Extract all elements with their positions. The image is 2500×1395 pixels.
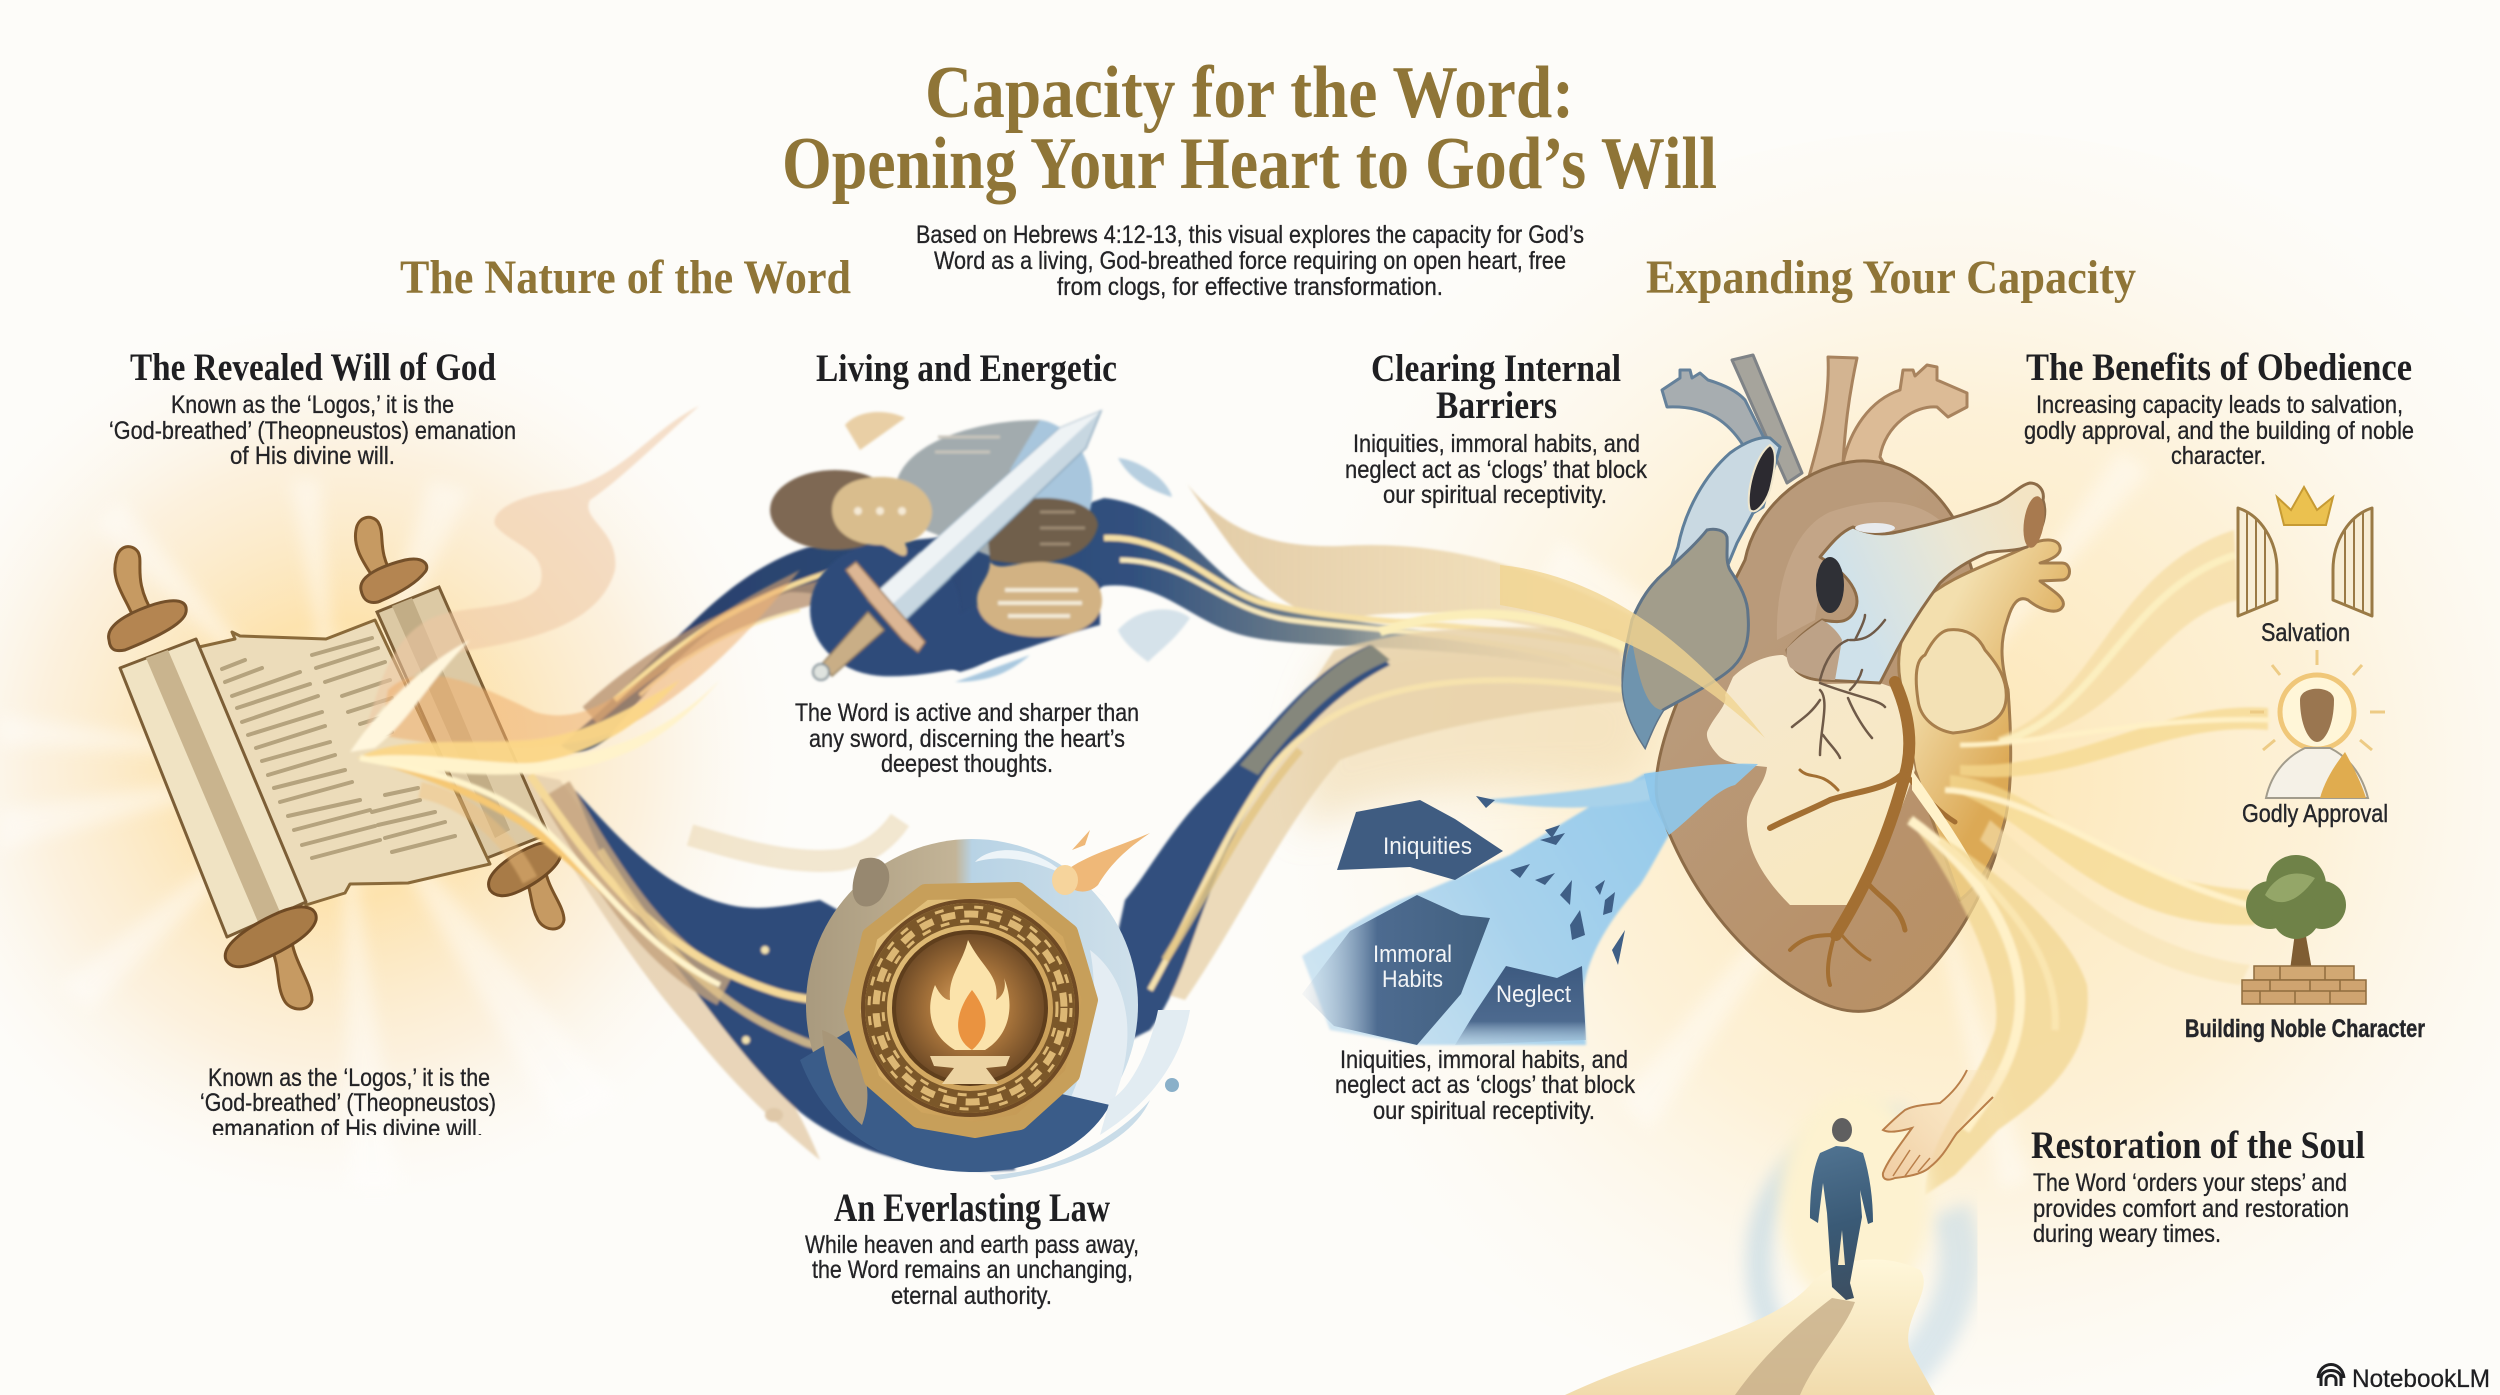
soft tan flow behind right side [1300, 639, 1660, 830]
rock: neglect [1455, 966, 1586, 1045]
text block: lower logos repeat (clipped): ‘God-breathed’ (Theopneustos) [200, 1089, 496, 1117]
scroll text lines [222, 638, 455, 858]
icon: godly approval figure [2250, 650, 2385, 798]
heart cream centre [1707, 655, 1915, 905]
intro text: from clogs, for effective transformation. [1057, 273, 1443, 301]
heart blue atrium [1660, 438, 1780, 600]
text block: living and energetic heading: Living and Energetic [816, 347, 1117, 390]
section heading: nature of the word: The Nature of the Word [400, 251, 851, 304]
text block: living and energetic body: any sword, discerning the heart’s [809, 725, 1125, 753]
right roll body [377, 587, 548, 858]
stream: lower wave to heart [1090, 614, 1765, 1060]
text block: clearing internal barriers: Clearing Internal [1371, 347, 1621, 390]
golden stream down to soul [1908, 818, 2088, 1195]
icon: golden medal with flame [852, 890, 1090, 1130]
path of light [1565, 1259, 1935, 1395]
heart cream lobe [1916, 630, 2006, 733]
rock: iniquities: Iniquities [1383, 833, 1472, 860]
text block: lower logos repeat (clipped): Known as the ‘Logos,’ it is the [208, 1064, 490, 1092]
intro text: Based on Hebrews 4:12-13, this visual explores the capacity for God’s [916, 221, 1584, 249]
text block: lower logos repeat (clipped) [201, 1068, 495, 1135]
text block: clogs repeat: our spiritual receptivity. [1373, 1097, 1595, 1125]
text block: clogs repeat: Iniquities, immoral habits, and [1340, 1046, 1628, 1074]
label: salvation: Salvation [2261, 619, 2350, 647]
intro text [916, 221, 1584, 301]
soul light swirl [1759, 1090, 1959, 1380]
stream: lower left wave [510, 770, 1015, 1171]
text block: restoration of the soul: during weary times. [2033, 1220, 2221, 1248]
text block: revealed will of god: ‘God-breathed’ (Theopneustos) emanation [109, 417, 516, 445]
label: godly approval: Godly Approval [2242, 800, 2388, 828]
icon: earth globe and navy swirl [800, 839, 1190, 1180]
title: Capacity for the Word: [925, 52, 1574, 134]
text block: restoration of the soul [2031, 1124, 2365, 1248]
heart right tan region [1899, 540, 2070, 900]
lower flanges [225, 907, 316, 967]
text block: benefits of obedience [2024, 346, 2414, 470]
flames from scroll [350, 406, 800, 985]
title: Opening Your Heart to God’s Will [782, 123, 1717, 205]
parchment [199, 620, 490, 905]
person shadow [1735, 1298, 1855, 1395]
text block: everlasting law: eternal authority. [891, 1282, 1052, 1310]
icon: tree on brick wall [2242, 855, 2366, 1004]
left roll body [120, 639, 306, 937]
heart main body [1656, 461, 2010, 1011]
text block: revealed will of god: Known as the ‘Logos,’ it is the [171, 391, 454, 419]
rock: immoral habits: Immoral [1373, 941, 1452, 968]
clog blue stream [1302, 764, 1758, 1045]
text block: revealed will of god: The Revealed Will of God [130, 346, 496, 389]
coronary branches [1770, 682, 1955, 985]
text block: benefits of obedience: character. [2171, 442, 2266, 470]
text block: clearing internal barriers: neglect act as ‘clogs’ that block [1345, 456, 1647, 484]
text block: living and energetic body: The Word is active and sharper than [795, 699, 1139, 727]
rock: immoral habits [1302, 895, 1490, 1045]
intro text: Word as a living, God-breathed force requiring on open heart, free [934, 247, 1566, 275]
heart vessels [1662, 355, 1967, 490]
text block: living and energetic body [795, 699, 1139, 778]
glow: heart radiance [1210, 130, 2500, 1395]
text block: clogs repeat: neglect act as ‘clogs’ that block [1335, 1071, 1635, 1099]
label: building noble character: Building Noble Character [2185, 1015, 2425, 1043]
text block: revealed will of god: of His divine will. [230, 442, 395, 470]
light beams entering heart [1500, 565, 1765, 738]
text block: clearing internal barriers: Iniquities, immoral habits, and [1353, 430, 1640, 458]
stream: upper wave to heart [561, 484, 1750, 752]
rock: iniquities [1337, 800, 1503, 880]
text block: everlasting law [805, 1185, 1139, 1310]
icon: scroll [109, 517, 564, 1009]
golden streams to benefits [1945, 530, 2270, 985]
heart gray lobe [1623, 529, 1748, 747]
glow: scroll radiance [0, 320, 840, 1200]
rock: immoral habits: Habits [1382, 966, 1443, 993]
text block: restoration of the soul: provides comfort and restoration [2033, 1195, 2349, 1223]
icon: gates and crown [2238, 487, 2372, 616]
text block: everlasting law: An Everlasting Law [834, 1185, 1110, 1230]
icon: reaching hand [1883, 1070, 2010, 1180]
text block: revealed will of god [109, 346, 516, 470]
blue arrowhead over heart [1644, 764, 1758, 835]
text block: clearing internal barriers: Barriers [1436, 384, 1557, 427]
rock: neglect: Neglect [1496, 981, 1571, 1008]
heart inner arch band [1777, 502, 1945, 640]
text block: clearing internal barriers: our spiritual receptivity. [1383, 481, 1607, 509]
icon: heart [1500, 355, 2070, 1011]
scroll rods and flanges [109, 517, 564, 1009]
text block: everlasting law: the Word remains an unchanging, [812, 1256, 1133, 1284]
text block: restoration of the soul: Restoration of the Soul [2031, 1124, 2365, 1167]
icon: speech cloud and sword [770, 411, 1190, 682]
icon: walking person [1810, 1118, 1873, 1300]
text block: benefits of obedience: The Benefits of Obedience [2026, 346, 2412, 389]
title [782, 52, 1717, 205]
text block: restoration of the soul: The Word ‘orders your steps’ and [2033, 1169, 2347, 1197]
text block: living and energetic body: deepest thoughts. [881, 750, 1053, 778]
barrier fragments [1476, 796, 1625, 965]
text block: benefits of obedience: Increasing capacity leads to salvation, [2036, 391, 2403, 419]
text block: clearing internal barriers [1345, 347, 1647, 509]
text block: everlasting law: While heaven and earth pass away, [805, 1231, 1139, 1259]
text block: lower logos repeat (clipped): emanation of His divine will. [212, 1115, 483, 1143]
pulmonary tube [1787, 483, 2045, 683]
section heading: expanding capacity: Expanding Your Capacity [1646, 251, 2136, 304]
notebooklm logo: NotebookLM [2352, 1365, 2490, 1393]
icon: flaming comet [1052, 830, 1150, 895]
text block: clogs repeat [1335, 1046, 1635, 1125]
text block: benefits of obedience: godly approval, and the building of noble [2024, 417, 2414, 445]
